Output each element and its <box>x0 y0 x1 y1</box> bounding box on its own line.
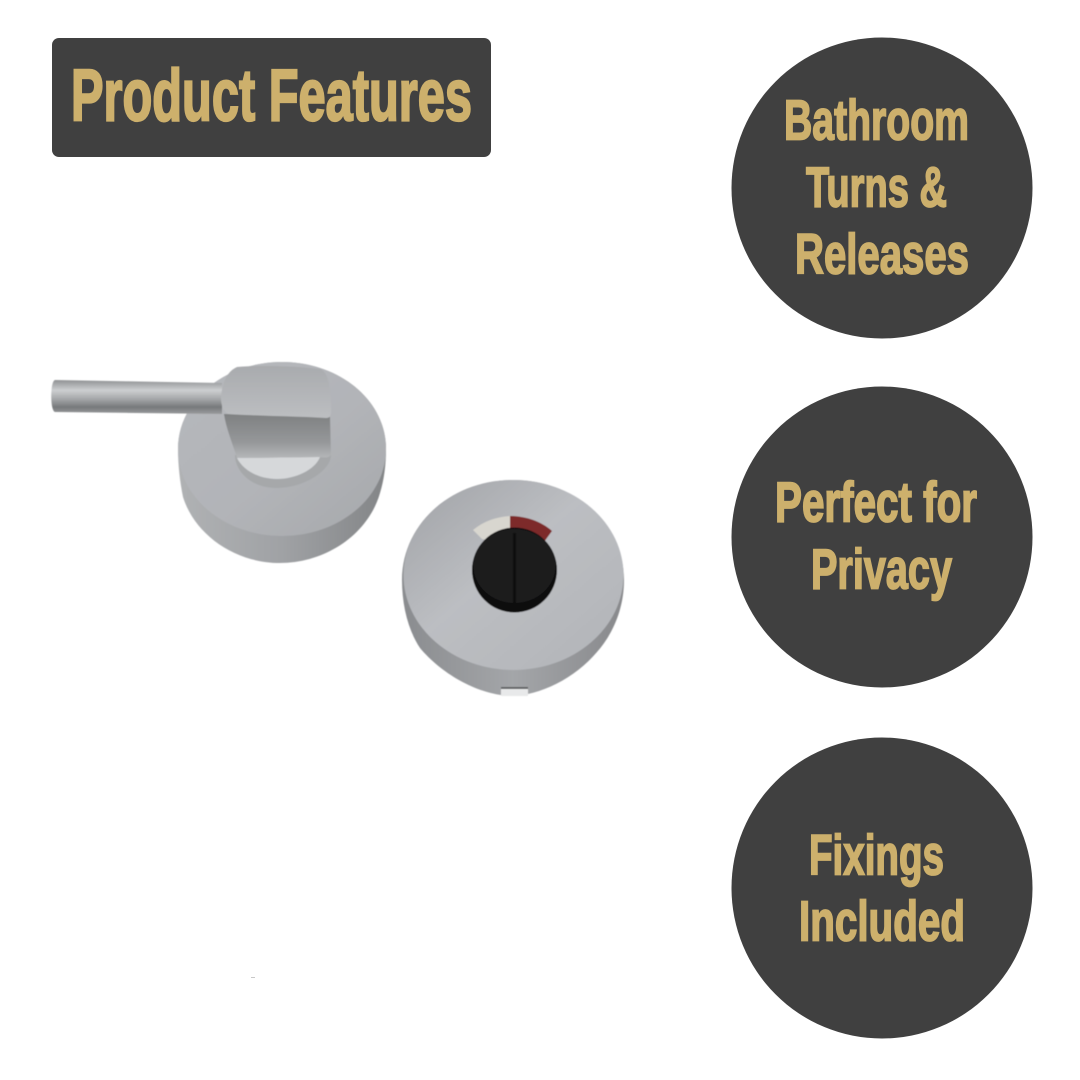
circle: Fixings Included: Fixings <box>809 824 944 888</box>
circle: Fixings Included: Included <box>799 890 965 954</box>
speck <box>251 977 255 978</box>
knob base highlight <box>237 457 320 479</box>
knob front <box>224 414 331 458</box>
knob base <box>235 455 331 488</box>
circle: Perfect for Privacy: Perfect for <box>775 470 977 534</box>
circle: Fixings Included <box>732 738 1032 1038</box>
circle: Perfect for Privacy: Privacy <box>811 538 952 602</box>
product: thumb turn with lever <box>51 362 386 563</box>
indicator white <box>473 516 510 545</box>
knob top <box>221 366 331 418</box>
circle: Bathroom Turns & Releases: Releases <box>795 222 969 286</box>
circle: Bathroom Turns & Releases: Turns & <box>806 156 947 220</box>
title banner: Product Features <box>71 56 472 136</box>
lever rod <box>51 380 222 414</box>
circle: Bathroom Turns & Releases <box>732 38 1032 338</box>
indicator red <box>510 516 552 545</box>
product: indicator plate <box>402 480 624 696</box>
plate top <box>404 480 624 670</box>
plate top <box>178 362 386 536</box>
title banner <box>52 38 491 157</box>
plate side <box>178 362 386 563</box>
circle: Bathroom Turns & Releases: Bathroom <box>784 88 969 152</box>
plate side <box>402 480 624 696</box>
circle: Perfect for Privacy <box>732 386 1032 688</box>
slot <box>501 687 528 696</box>
black knob <box>472 528 557 612</box>
